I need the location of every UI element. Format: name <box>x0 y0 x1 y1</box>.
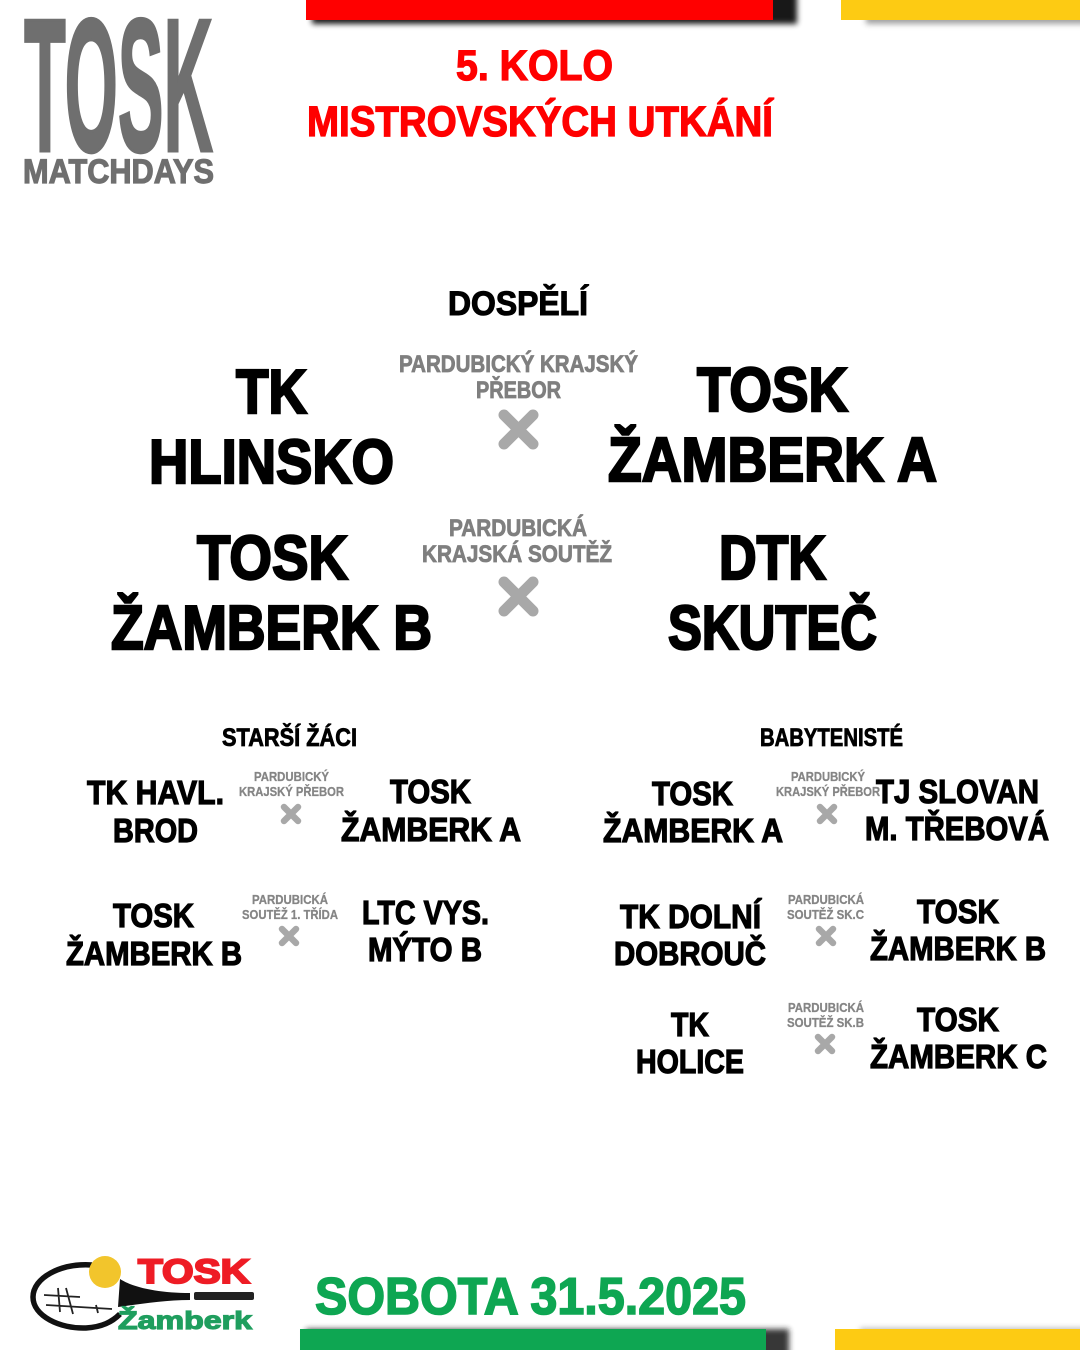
match: TOSK Žamberk A vs TJ Slovan M. Třebová: M. TŘEBOVÁ <box>865 810 1049 848</box>
match: TK Havl. Brod vs TOSK Žamberk A: ŽAMBERK A <box>341 811 521 849</box>
bottom green bar <box>300 1329 789 1350</box>
heading: dospělí: DOSPĚLÍ <box>448 285 589 323</box>
league label <box>422 514 612 568</box>
match: TK Dolní Dobrouč vs TOSK Žamberk B: TOSK <box>917 894 999 931</box>
home team: ŽAMBERK B <box>111 594 432 663</box>
top yellow bar <box>841 0 1080 24</box>
bottom yellow bar <box>835 1328 1080 1350</box>
title: MISTROVSKÝCH UTKÁNÍ <box>307 98 774 146</box>
match: TOSK Žamberk A vs TJ Slovan M. Třebová: ŽAMBERK A <box>603 812 783 850</box>
match: TK Dolní Dobrouč vs TOSK Žamberk B: SOUTĚŽ SK.C <box>787 907 865 922</box>
match: TOSK Žamberk B vs LTC Vys. Mýto B: SOUTĚŽ 1. TŘÍDA <box>242 907 339 922</box>
icon: cross <box>504 582 533 611</box>
league label <box>399 350 638 404</box>
match: TK Hlinsko vs TOSK Žamberk A <box>149 350 937 497</box>
match: TK Holice vs TOSK Žamberk C: SOUTĚŽ SK.B <box>787 1015 864 1030</box>
title: 5. KOLO <box>456 42 613 90</box>
league label: PARDUBICKÁ <box>449 514 587 542</box>
title <box>307 42 774 146</box>
logo: TOSK Matchdays: MATCHDAYS <box>23 153 214 191</box>
logo TOSK: TOSK <box>138 1253 251 1291</box>
match: TK Dolní Dobrouč vs TOSK Žamberk B: DOBROUČ <box>614 934 766 973</box>
icon: cross <box>504 415 533 444</box>
match: TOSK Žamberk A vs TJ Slovan M. Třebová: TOSK <box>652 776 733 813</box>
home team <box>149 358 394 497</box>
logo: TOSK Matchdays <box>23 0 214 192</box>
match: TOSK Žamberk A vs TJ Slovan M. Třebová: PARDUBICKÝ <box>791 769 865 784</box>
match: TOSK Žamberk B vs LTC Vys. Mýto B: ŽAMBERK B <box>66 935 242 973</box>
home team: TK <box>236 358 307 427</box>
match: TK Holice vs TOSK Žamberk C: PARDUBICKÁ <box>788 1000 865 1015</box>
date: SOBOTA 31.5.2025 <box>315 1268 746 1326</box>
match: TOSK Žamberk A vs TJ Slovan M. Třebová <box>603 769 1049 850</box>
match: TK Dolní Dobrouč vs TOSK Žamberk B: ŽAMBERK B <box>870 930 1046 968</box>
match: TK Havl. Brod vs TOSK Žamberk A: TK HAVL. <box>87 775 224 812</box>
match: TOSK Žamberk B vs LTC Vys. Mýto B: TOSK <box>113 898 194 935</box>
away team: SKUTEČ <box>668 594 877 663</box>
match: TOSK Žamberk B vs LTC Vys. Mýto B <box>66 892 489 973</box>
heading: starší žáci: STARŠÍ ŽÁCI <box>222 722 357 752</box>
match: TOSK Žamberk B vs LTC Vys. Mýto B: LTC VYS. <box>362 895 489 932</box>
match: TOSK Žamberk B vs LTC Vys. Mýto B: PARDUBICKÁ <box>252 892 329 907</box>
away team: TOSK <box>697 356 848 425</box>
heading: babytenisté: BABYTENISTÉ <box>760 723 903 752</box>
logo: TOSK Žamberk tennis racket <box>33 1253 254 1335</box>
home team <box>111 524 432 663</box>
away team: ŽAMBERK A <box>608 426 937 495</box>
match: TK Dolní Dobrouč vs TOSK Žamberk B: TK DOLNÍ <box>620 898 762 936</box>
match: TK Holice vs TOSK Žamberk C: HOLICE <box>636 1044 744 1081</box>
home team: HLINSKO <box>149 428 394 497</box>
logo Žamberk: Žamberk <box>118 1305 252 1335</box>
racket grip <box>194 1292 254 1300</box>
match: TOSK Žamberk B vs LTC Vys. Mýto B: MÝTO B <box>368 931 482 969</box>
racket head <box>33 1265 120 1328</box>
match: TK Havl. Brod vs TOSK Žamberk A: BROD <box>113 813 198 850</box>
league label: KRAJSKÁ SOUTĚŽ <box>422 540 612 568</box>
match: TK Dolní Dobrouč vs TOSK Žamberk B: PARDUBICKÁ <box>788 892 865 907</box>
away team: DTK <box>719 524 826 593</box>
match: TK Havl. Brod vs TOSK Žamberk A <box>87 769 521 850</box>
match: TK Havl. Brod vs TOSK Žamberk A: PARDUBICKÝ <box>254 769 329 784</box>
away team <box>668 524 877 663</box>
match: TK Havl. Brod vs TOSK Žamberk A: TOSK <box>390 774 471 811</box>
racket strings <box>44 1288 112 1314</box>
racket handle <box>118 1279 190 1307</box>
top red bar <box>306 0 797 24</box>
home team: TOSK <box>197 524 348 593</box>
away team <box>608 356 937 495</box>
match: TOSK Žamberk A vs TJ Slovan M. Třebová: TJ SLOVAN <box>876 774 1039 811</box>
league label: PARDUBICKÝ KRAJSKÝ <box>399 350 638 378</box>
match: TK Havl. Brod vs TOSK Žamberk A: KRAJSKÝ PŘEBOR <box>239 784 345 799</box>
league label: PŘEBOR <box>476 376 561 404</box>
match: TOSK Žamberk B vs DTK Skuteč <box>111 514 877 663</box>
match: TOSK Žamberk A vs TJ Slovan M. Třebová: KRAJSKÝ PŘEBOR <box>776 784 881 799</box>
match: TK Holice vs TOSK Žamberk C: TOSK <box>917 1002 999 1039</box>
match: TK Holice vs TOSK Žamberk C: TK <box>671 1007 709 1044</box>
tennis ball <box>89 1256 121 1288</box>
match: TK Holice vs TOSK Žamberk C <box>636 1000 1047 1081</box>
match: TK Holice vs TOSK Žamberk C: ŽAMBERK C <box>870 1038 1047 1076</box>
match: TK Dolní Dobrouč vs TOSK Žamberk B <box>614 892 1046 973</box>
